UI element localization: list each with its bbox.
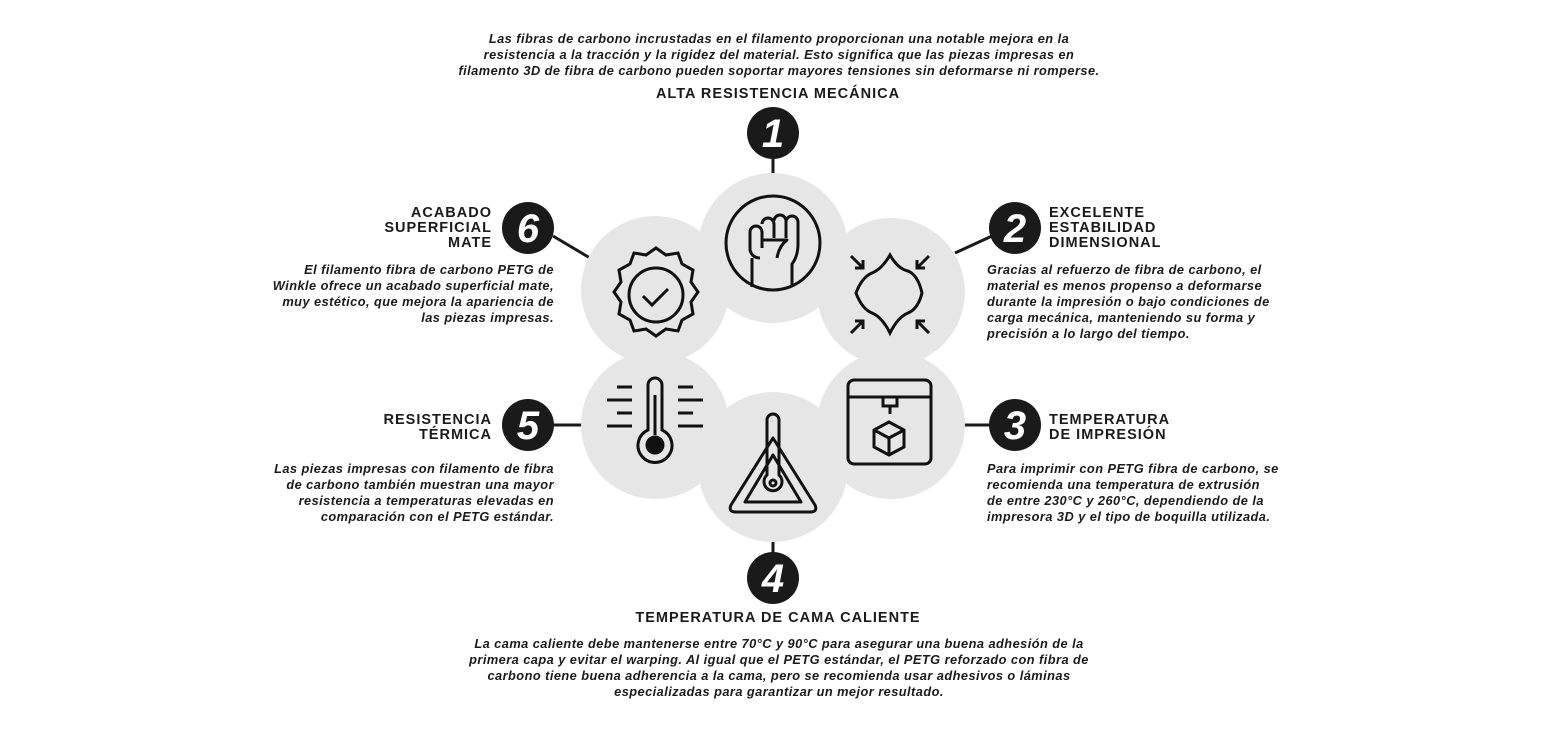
number circles bbox=[502, 107, 1041, 604]
text 3 bbox=[987, 461, 1279, 524]
text 5: comparación con el PETG estándar. bbox=[321, 509, 554, 524]
intro text 1: resistencia a la tracción y la rigidez del material. Esto significa que las piezas impresas en bbox=[484, 47, 1074, 62]
heading 1: ALTA RESISTENCIA MECÁNICA bbox=[656, 86, 900, 102]
heading 6: MATE bbox=[448, 235, 492, 251]
diagram: 5 bbox=[517, 404, 540, 448]
heading 3 bbox=[1049, 412, 1170, 443]
diagram: 2 bbox=[1003, 207, 1026, 251]
text 2: precisión a lo largo del tiempo. bbox=[987, 326, 1190, 341]
heading 3: DE IMPRESIÓN bbox=[1049, 427, 1167, 443]
text 5 bbox=[274, 461, 554, 524]
heading 6: SUPERFICIAL bbox=[384, 220, 492, 236]
text 2: material es menos propenso a deformarse bbox=[987, 278, 1262, 293]
text 6: las piezas impresas. bbox=[421, 310, 554, 325]
diagram: 6 bbox=[517, 207, 540, 251]
heading 3: TEMPERATURA bbox=[1049, 412, 1170, 428]
text 6 bbox=[273, 262, 554, 325]
heading 6 bbox=[384, 205, 492, 251]
text 6: Winkle ofrece un acabado superficial mate, bbox=[273, 278, 554, 293]
icon: badge check bbox=[614, 248, 698, 336]
diagram: 1 bbox=[762, 112, 784, 156]
text 3: impresora 3D y el tipo de boquilla utilizada. bbox=[987, 509, 1270, 524]
text 2: Gracias al refuerzo de fibra de carbono, el bbox=[987, 262, 1262, 277]
text 4: especializadas para garantizar un mejor resultado. bbox=[614, 684, 944, 699]
heading 6: ACABADO bbox=[411, 205, 492, 221]
heading 2 bbox=[1049, 205, 1162, 251]
intro text 1: Las fibras de carbono incrustadas en el filamento proporcionan una notable mejora en la bbox=[489, 31, 1069, 46]
icon: warning thermometer bbox=[730, 414, 816, 512]
heading 2: DIMENSIONAL bbox=[1049, 235, 1162, 251]
icon: thermometer lines bbox=[607, 378, 703, 462]
text 4: carbono tiene buena adherencia a la cama, pero se recomienda usar adhesivos o láminas bbox=[487, 668, 1071, 683]
text 2 bbox=[986, 262, 1270, 341]
text 3: recomienda una temperatura de extrusión bbox=[987, 477, 1260, 492]
text 3: Para imprimir con PETG fibra de carbono, se bbox=[987, 461, 1279, 476]
text 4 bbox=[468, 636, 1089, 699]
gray circles bbox=[581, 173, 965, 542]
icon: printer bbox=[848, 380, 931, 464]
intro text 1 bbox=[458, 31, 1100, 78]
diagram: 3 bbox=[1004, 404, 1026, 448]
text 5: resistencia a temperaturas elevadas en bbox=[299, 493, 554, 508]
text 6: El filamento fibra de carbono PETG de bbox=[304, 262, 554, 277]
heading 5 bbox=[384, 412, 492, 443]
text 3: de entre 230°C y 260°C, dependiendo de la bbox=[987, 493, 1264, 508]
text 4: La cama caliente debe mantenerse entre 70°C y 90°C para asegurar una buena adhesión de la bbox=[474, 636, 1084, 651]
text 2: durante la impresión o bajo condiciones de bbox=[987, 294, 1270, 309]
diagram: 4 bbox=[761, 557, 784, 601]
text 6: muy estético, que mejora la apariencia de bbox=[282, 294, 554, 309]
icon: dimensional bbox=[851, 255, 929, 333]
heading 2: EXCELENTE bbox=[1049, 205, 1145, 221]
heading 4: TEMPERATURA DE CAMA CALIENTE bbox=[635, 610, 921, 626]
icon: fist bbox=[726, 196, 820, 290]
text 5: Las piezas impresas con filamento de fibra bbox=[274, 461, 554, 476]
text 2: carga mecánica, manteniendo su forma y bbox=[987, 310, 1255, 325]
intro text 1: filamento 3D de fibra de carbono pueden soportar mayores tensiones sin deformarse ni romperse. bbox=[458, 63, 1100, 78]
heading 5: RESISTENCIA bbox=[384, 412, 492, 428]
text 5: de carbono también muestran una mayor bbox=[286, 477, 554, 492]
heading 2: ESTABILIDAD bbox=[1049, 220, 1156, 236]
text 4: primera capa y evitar el warping. Al igual que el PETG estándar, el PETG reforzado con fibra de bbox=[469, 652, 1089, 667]
heading 5: TÉRMICA bbox=[419, 427, 492, 443]
